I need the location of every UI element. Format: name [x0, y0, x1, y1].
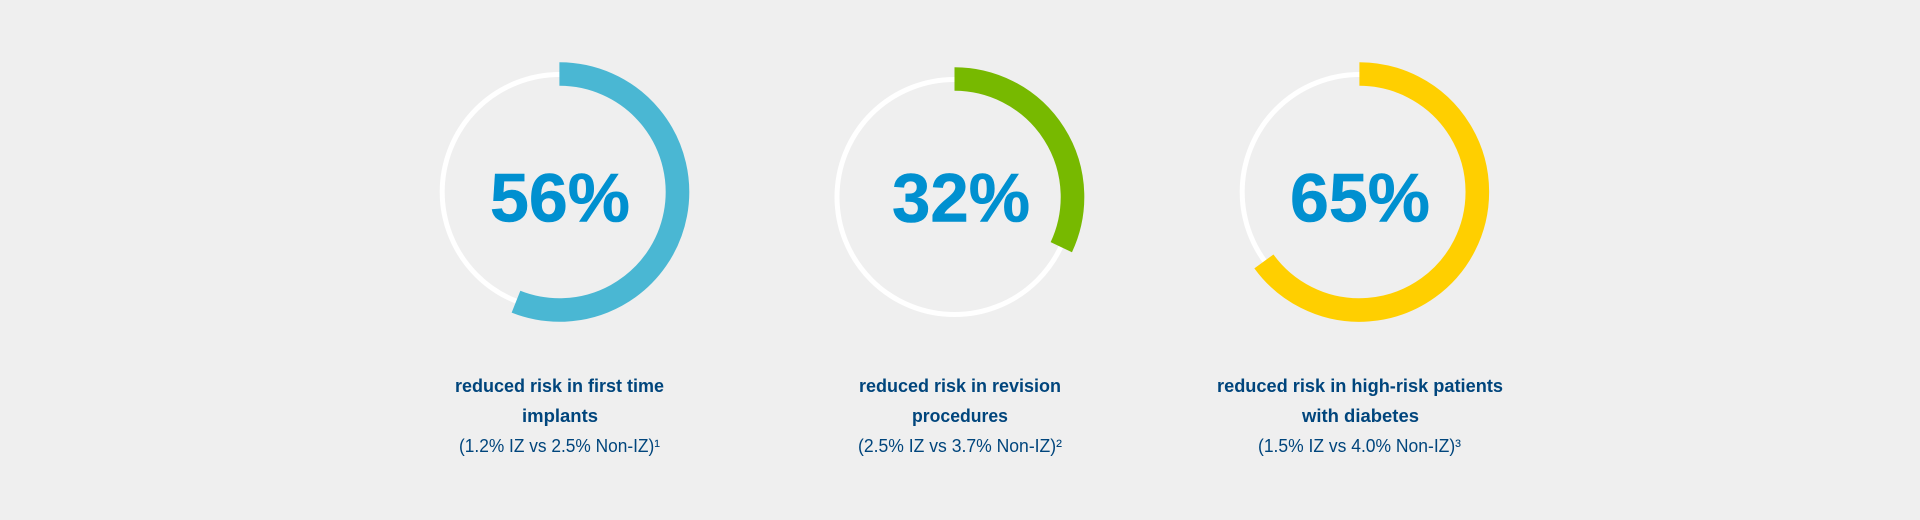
statistic: 65%: 65% [1290, 160, 1430, 236]
panel: first time implants [442, 74, 677, 456]
description: high-risk patients: (1.5% IZ vs 4.0% Non-IZ)³ [1258, 436, 1461, 456]
panel: high-risk patients with diabetes [1217, 74, 1503, 456]
description: revision procedures: reduced risk in revision [859, 376, 1061, 396]
progress arc: 65% [1264, 74, 1477, 310]
progress arc: 56% [516, 74, 677, 310]
description: first time implants: implants [522, 406, 598, 426]
panel: revision procedures [837, 79, 1073, 456]
ring track: revision procedures [837, 80, 1072, 314]
progress arc: 32% [954, 79, 1073, 247]
description: first time implants [455, 376, 664, 456]
description: revision procedures: procedures [912, 406, 1008, 426]
description: high-risk patients: reduced risk in high-risk patients [1217, 376, 1503, 396]
description: revision procedures: (2.5% IZ vs 3.7% Non-IZ)² [858, 436, 1062, 456]
statistic: 32%: 32% [892, 160, 1030, 236]
description: revision procedures [858, 376, 1062, 456]
ring track: high-risk patients [1242, 74, 1477, 310]
description: first time implants: reduced risk in first time [455, 376, 664, 396]
description: high-risk patients [1217, 376, 1503, 456]
description: first time implants: (1.2% IZ vs 2.5% Non-IZ)¹ [459, 436, 660, 456]
statistic: 56%: 56% [490, 160, 630, 236]
description: high-risk patients: with diabetes [1301, 406, 1419, 426]
ring track: first time implants [442, 74, 677, 310]
